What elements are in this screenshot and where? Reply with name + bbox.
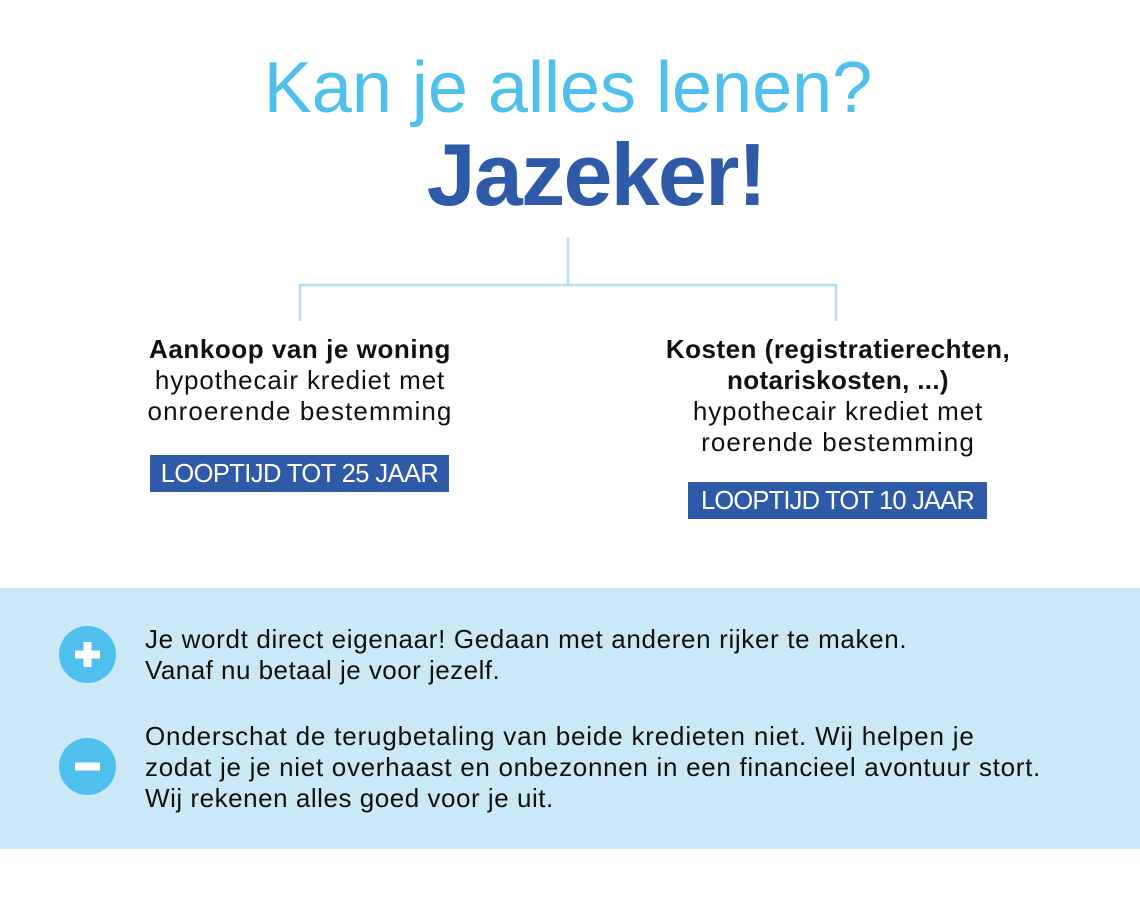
text: advantage <box>145 624 907 685</box>
panel: pros and cons <box>0 588 1140 849</box>
text: advantage: Je wordt direct eigenaar! Gedaan met anderen rijker te maken. <box>145 624 907 654</box>
text: disadvantage: Wij rekenen alles goed voor je uit. <box>145 783 554 813</box>
right column: costs: notariskosten, ...) <box>727 365 949 395</box>
right column: costs: roerende bestemming <box>701 427 975 457</box>
title: question: Kan je alles lenen? <box>264 48 872 128</box>
icon: plus <box>59 626 116 683</box>
title: answer: Jazeker! <box>427 125 765 224</box>
right column: costs <box>666 334 1010 457</box>
badge: term 10 years <box>688 482 987 519</box>
badge: term 25 years: LOOPTIJD TOT 25 JAAR <box>161 460 438 488</box>
text: disadvantage: Onderschat de terugbetaling van beide kredieten niet. Wij helpen je <box>145 721 975 751</box>
icon: minus <box>59 738 116 795</box>
left column: property purchase: Aankoop van je woning <box>149 334 451 364</box>
right column: costs: Kosten (registratierechten, <box>666 334 1010 364</box>
text: disadvantage: zodat je je niet overhaast en onbezonnen in een financieel avontuur stort. <box>145 752 1041 782</box>
connector lines <box>298 237 838 321</box>
left column: property purchase: onroerende bestemming <box>148 396 452 426</box>
text: advantage: Vanaf nu betaal je voor jezelf. <box>145 655 500 685</box>
left column: property purchase: hypothecair krediet met <box>155 365 445 395</box>
text: disadvantage <box>145 721 1041 813</box>
left column: property purchase <box>148 334 452 426</box>
badge: term 10 years: LOOPTIJD TOT 10 JAAR <box>701 487 974 515</box>
right column: costs: hypothecair krediet met <box>693 396 983 426</box>
